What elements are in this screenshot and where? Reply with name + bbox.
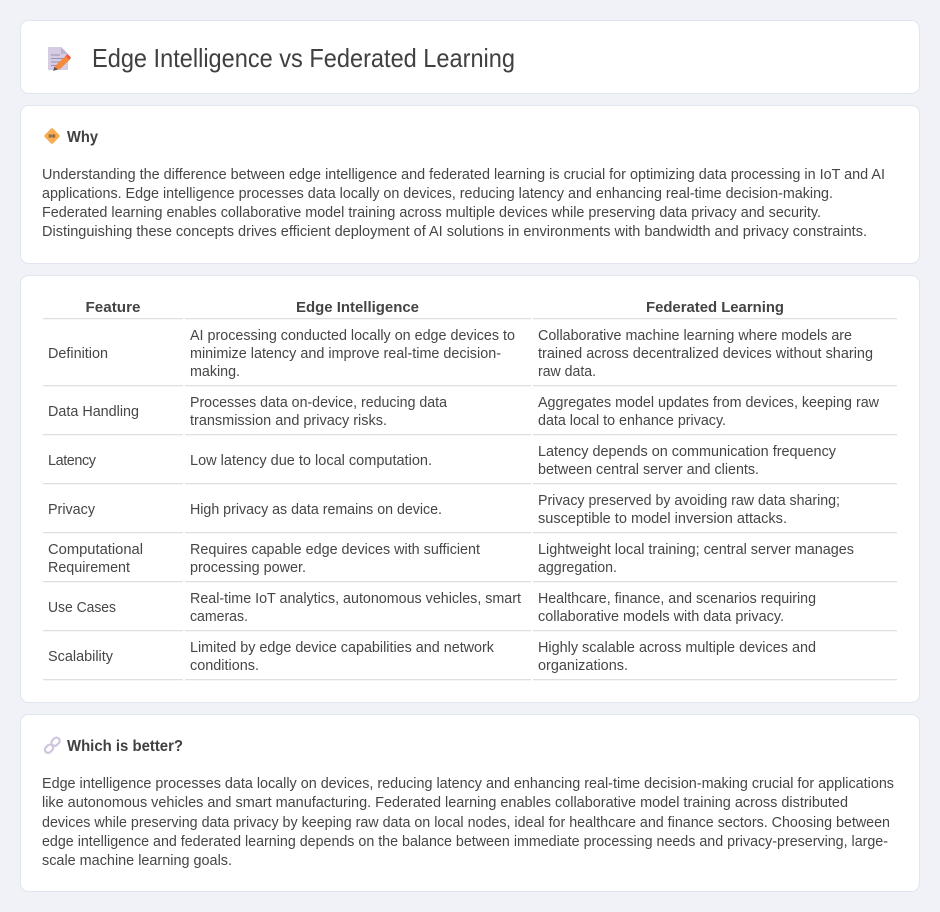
heading: why: Why (67, 129, 98, 146)
text block: why paragraph (42, 167, 885, 240)
panel: which is better (20, 714, 920, 892)
row: definition: minimize latency and improve real-time decision- (190, 346, 501, 362)
text block: which is better paragraph: devices while preserving data privacy by keeping raw data on local nodes, ideal for healthcare and finance sectors. Choosing between (42, 815, 890, 831)
icon: document with pencil (48, 47, 71, 71)
row: computational requirement: processing power. (190, 560, 306, 576)
row: data handling: transmission and privacy risks. (190, 413, 387, 429)
row: privacy: Privacy preserved by avoiding raw data sharing; (538, 493, 840, 509)
row: computational requirement (43, 542, 897, 582)
row: use cases: Healthcare, finance, and scenarios requiring (538, 591, 816, 607)
row: definition: AI processing conducted locally on edge devices to (190, 328, 515, 344)
row: latency (43, 444, 897, 484)
row: latency: between central server and clients. (538, 462, 759, 478)
row: use cases (43, 591, 897, 631)
text block: which is better paragraph: edge intelligence and federated learning depends on the balance between immediate processing needs and privacy-preserving, large- (42, 834, 888, 850)
text block: which is better paragraph: Edge intelligence processes data locally on devices, reducing latency and enhancing real-time decision-making crucial for applications (42, 776, 894, 792)
text block: which is better paragraph: like autonomous vehicles and smart manufacturing. Federated learning enables collaborative model training across distributed (42, 795, 848, 811)
heading: which is better: Which is better? (67, 738, 183, 755)
row: use cases: Use Cases (48, 600, 116, 616)
row: scalability: Limited by edge device capabilities and network (190, 640, 495, 656)
panel: comparison table (20, 276, 920, 702)
row: privacy: High privacy as data remains on device. (190, 502, 442, 518)
table header row: Federated Learning (646, 300, 784, 316)
row: computational requirement: Requirement (48, 560, 130, 576)
row: latency: Low latency due to local computation. (190, 453, 432, 469)
row: definition: raw data. (538, 364, 596, 380)
row: data handling: Aggregates model updates from devices, keeping raw (538, 395, 880, 411)
row: privacy (43, 493, 897, 533)
row: scalability: organizations. (538, 658, 628, 674)
text block: why paragraph: Understanding the difference between edge intelligence and federated learning is crucial for optimizing data processing in IoT and AI (42, 167, 885, 183)
text block: which is better paragraph (42, 776, 894, 869)
row: data handling: data local to enhance privacy. (538, 413, 726, 429)
row: definition: Collaborative machine learning where models are (538, 328, 852, 344)
text block: why paragraph: Distinguishing these concepts drives efficient deployment of AI solutions in environments with bandwidth and privacy constraints. (42, 224, 867, 240)
row: data handling (43, 395, 897, 435)
row: scalability (43, 640, 897, 680)
row: use cases: Real-time IoT analytics, autonomous vehicles, smart (190, 591, 521, 607)
panel: title header (20, 20, 920, 94)
row: use cases: collaborative models with data privacy. (538, 609, 784, 625)
row: definition: trained across decentralized devices without sharing (538, 346, 873, 362)
row: latency: Latency depends on communication frequency (538, 444, 837, 460)
row: privacy: Privacy (48, 502, 96, 518)
row: scalability: Scalability (48, 649, 114, 665)
row: privacy: susceptible to model inversion attacks. (538, 511, 787, 527)
row: definition: making. (190, 364, 240, 380)
text block: why paragraph: Federated learning enables collaborative model training across multiple devices while preserving data privacy and security. (42, 205, 821, 221)
row: computational requirement: Lightweight local training; central server manages (538, 542, 854, 558)
panel: why (20, 106, 920, 264)
text block: why paragraph: applications. Edge intelligence processes data locally on devices, reducing latency and enhancing real-time decision-making. (42, 186, 833, 202)
title: Edge Intelligence vs Federated Learning (92, 45, 515, 73)
icon: orange diamond sign (44, 128, 60, 144)
table header row: Feature (86, 300, 140, 316)
row: data handling: Data Handling (48, 404, 139, 420)
row: scalability: conditions. (190, 658, 259, 674)
row: data handling: Processes data on-device, reducing data (190, 395, 447, 411)
row: computational requirement: Computational (48, 542, 143, 558)
row: computational requirement: Requires capable edge devices with sufficient (190, 542, 480, 558)
row: computational requirement: aggregation. (538, 560, 617, 576)
icon: link (44, 736, 61, 754)
table header row (43, 300, 897, 319)
row: scalability: Highly scalable across multiple devices and (538, 640, 816, 656)
text block: which is better paragraph: scale machine learning goals. (42, 853, 232, 869)
row: use cases: cameras. (190, 609, 248, 625)
row: latency: Latency (48, 453, 97, 469)
table header row: Edge Intelligence (296, 300, 419, 316)
row: definition (43, 328, 897, 386)
row: definition: Definition (48, 346, 108, 362)
